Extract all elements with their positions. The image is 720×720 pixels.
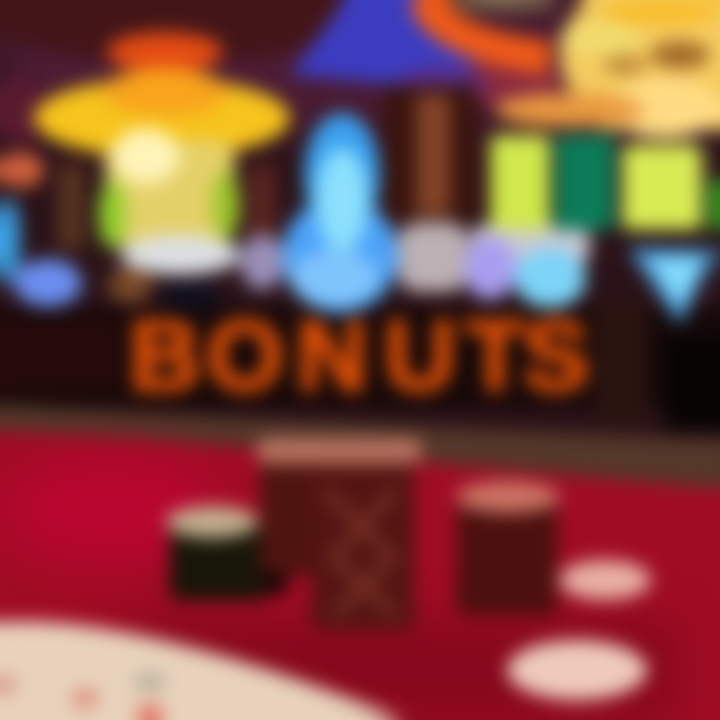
bar ledge <box>0 404 720 490</box>
center blue lamp <box>240 113 398 313</box>
neon sign text: BONUTS <box>129 300 589 412</box>
cards: lower left <box>0 621 405 720</box>
dark pillars <box>0 300 720 430</box>
yellow lamp <box>34 32 290 311</box>
ceiling: purple-blue canopy <box>290 0 560 104</box>
chip stack: center front <box>256 438 422 630</box>
chip stack: left <box>166 506 289 600</box>
card on table: lower right <box>507 640 647 700</box>
left blue lamp <box>0 152 82 307</box>
ceiling: orange arc <box>425 0 560 58</box>
center brown column <box>385 85 477 292</box>
red table <box>0 430 720 720</box>
ceiling: dark maroon canopy <box>0 0 350 145</box>
card on table: upper right <box>559 560 651 600</box>
right yellow and green lamp <box>490 0 720 230</box>
right light blue lamp <box>464 225 590 308</box>
chip stack: center back <box>260 450 330 575</box>
chip stack: right <box>456 481 560 615</box>
icon: blue triangle lamp <box>628 248 716 325</box>
